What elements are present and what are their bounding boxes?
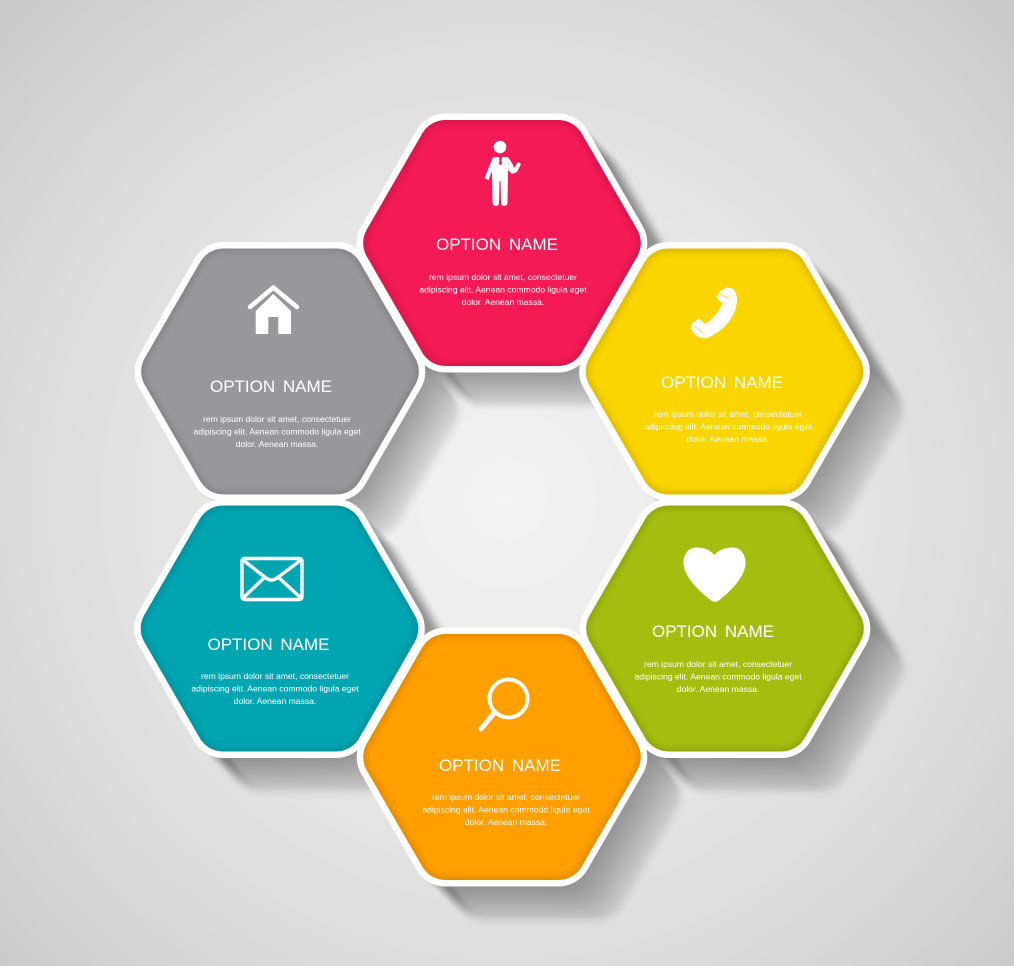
text block: teal: dolor. Aenean massa. — [234, 696, 316, 706]
icon: magnifier — [481, 680, 528, 729]
text block: gray: rem ipsum dolor sit amet, consectetuer — [203, 414, 351, 424]
panel: teal hexagon — [141, 506, 418, 752]
text block: green: dolor. Aenean massa. — [677, 684, 759, 694]
panel: gray hexagon — [141, 248, 419, 494]
text block: green: rem ipsum dolor sit amet, consectetuer — [644, 659, 792, 669]
icon: businessman — [484, 141, 521, 206]
text block: gray: adipiscing elit. Aenean commodo ligula eget — [193, 427, 361, 437]
text block: yellow: adipiscing elit. Aenean commodo ligula eget — [644, 422, 812, 432]
text block: teal: adipiscing elit. Aenean commodo ligula eget — [191, 684, 359, 694]
heading: teal option: OPTION NAME — [207, 635, 330, 654]
heading: yellow option: OPTION NAME — [661, 373, 783, 392]
panel: pink hexagon — [363, 120, 641, 366]
heading: green option: OPTION NAME — [652, 622, 774, 641]
text block: yellow: dolor. Aenean massa. — [687, 434, 769, 444]
text block: orange: adipiscing elit. Aenean commodo ligula eget — [422, 805, 590, 815]
text block: orange: rem ipsum dolor sit amet, consectetuer — [432, 792, 580, 802]
panel: green hexagon — [586, 506, 864, 752]
text block: pink: adipiscing elit. Aenean commodo ligula eget — [419, 285, 587, 295]
heading: gray option: OPTION NAME — [210, 377, 332, 396]
text block: yellow: rem ipsum dolor sit amet, consectetuer — [654, 409, 802, 419]
panel: yellow hexagon — [586, 248, 863, 494]
panel: orange hexagon — [363, 634, 641, 880]
text block: gray: dolor. Aenean massa. — [236, 439, 318, 449]
text block: pink: rem ipsum dolor sit amet, consectetuer — [429, 272, 577, 282]
icon: envelope — [242, 558, 302, 600]
text block: teal: rem ipsum dolor sit amet, consectetuer — [201, 671, 349, 681]
icon: telephone — [691, 288, 737, 338]
icon: heart — [684, 548, 746, 602]
text block: orange: dolor. Aenean massa. — [465, 817, 547, 827]
icon: house — [250, 288, 297, 334]
text block: green: adipiscing elit. Aenean commodo ligula eget — [634, 672, 802, 682]
text block: pink: dolor. Aenean massa. — [462, 297, 544, 307]
long shadows — [144, 123, 903, 919]
heading: pink option: OPTION NAME — [436, 235, 558, 254]
heading: orange option: OPTION NAME — [439, 756, 561, 775]
